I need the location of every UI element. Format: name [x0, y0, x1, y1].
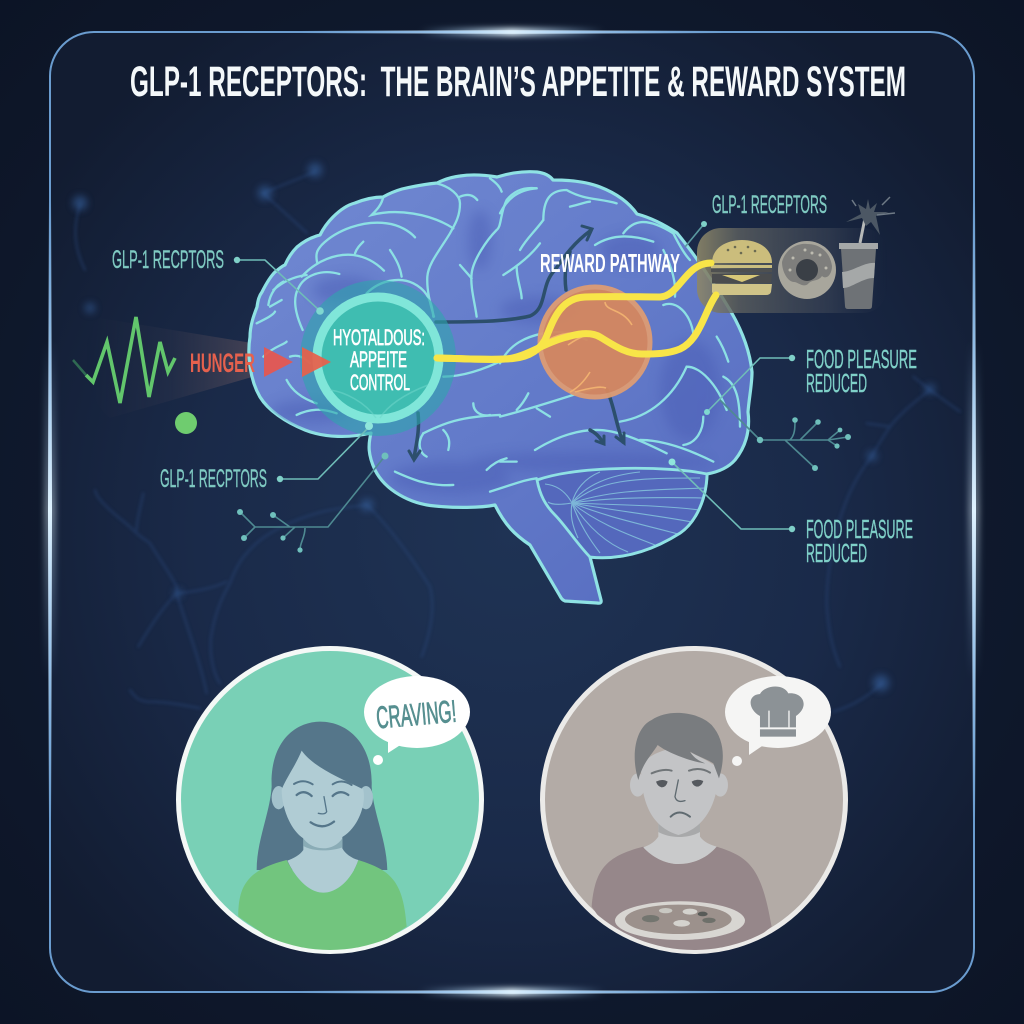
callout: food pleasure upper: FOOD PLEASURE [806, 344, 917, 374]
hypothalamus: appetite control: HYOTALDOUS: [333, 325, 425, 350]
callout: GLP-1 top left [112, 246, 324, 315]
neuron branch: right [720, 400, 851, 471]
callout: GLP-1 bottom left: GLP-1 RECPTORS [160, 465, 267, 493]
hunger signal heartbeat [86, 317, 175, 403]
thought bubble: chef hat [725, 676, 831, 766]
man portrait [592, 713, 772, 950]
icon: donut [778, 241, 836, 299]
neuron branch: lower left [237, 452, 388, 553]
callout: food pleasure upper [704, 344, 917, 415]
status dot [175, 412, 197, 434]
neuron glow dots [73, 163, 935, 691]
hunger signal cone [86, 318, 252, 418]
hunger arrows [264, 347, 331, 377]
text: GLP-1 RECEPTORS [712, 191, 827, 219]
cerebrum outline [249, 172, 752, 603]
cerebellum [537, 468, 707, 558]
icon: soda cup [839, 218, 878, 309]
text: FOOD PLEASURE [806, 514, 913, 544]
dark pathway arrows [409, 226, 624, 460]
icon: burger [711, 240, 772, 295]
speech bubble: craving [364, 676, 470, 765]
brain illustration [249, 172, 752, 603]
callout: GLP-1 top right [685, 191, 827, 247]
callout: food pleasure lower [668, 458, 913, 568]
callout: food pleasure lower: REDUCED [806, 538, 867, 568]
panel: craving woman [178, 648, 482, 952]
reward centre circle [540, 287, 650, 397]
reward pathway label: REWARD PATHWAY [540, 248, 680, 278]
woman portrait [238, 722, 407, 950]
icon: fizz burst [846, 197, 895, 235]
callout: GLP-1 bottom left [160, 422, 373, 493]
plate [615, 901, 745, 940]
food icons panel [697, 197, 895, 313]
brain folds [257, 178, 740, 492]
speech bubble: craving: CRAVING! [375, 694, 458, 735]
brain shading [270, 210, 720, 494]
hypothalamus: appetite control [300, 280, 456, 436]
icon: chef hat [751, 687, 804, 737]
callout: food pleasure upper: REDUCED [806, 368, 867, 398]
neural network background [75, 172, 960, 712]
heartbeat fade tail [73, 360, 86, 375]
callout: GLP-1 top left: GLP-1 RECPTORS [112, 246, 224, 274]
yellow reward pathway [437, 263, 716, 359]
panel: reduced appetite man [542, 648, 846, 952]
hypothalamus: appetite control: APPEITE [350, 347, 407, 372]
hypothalamus: appetite control: CONTROL [350, 370, 410, 395]
hunger label: HUNGER [190, 348, 255, 378]
